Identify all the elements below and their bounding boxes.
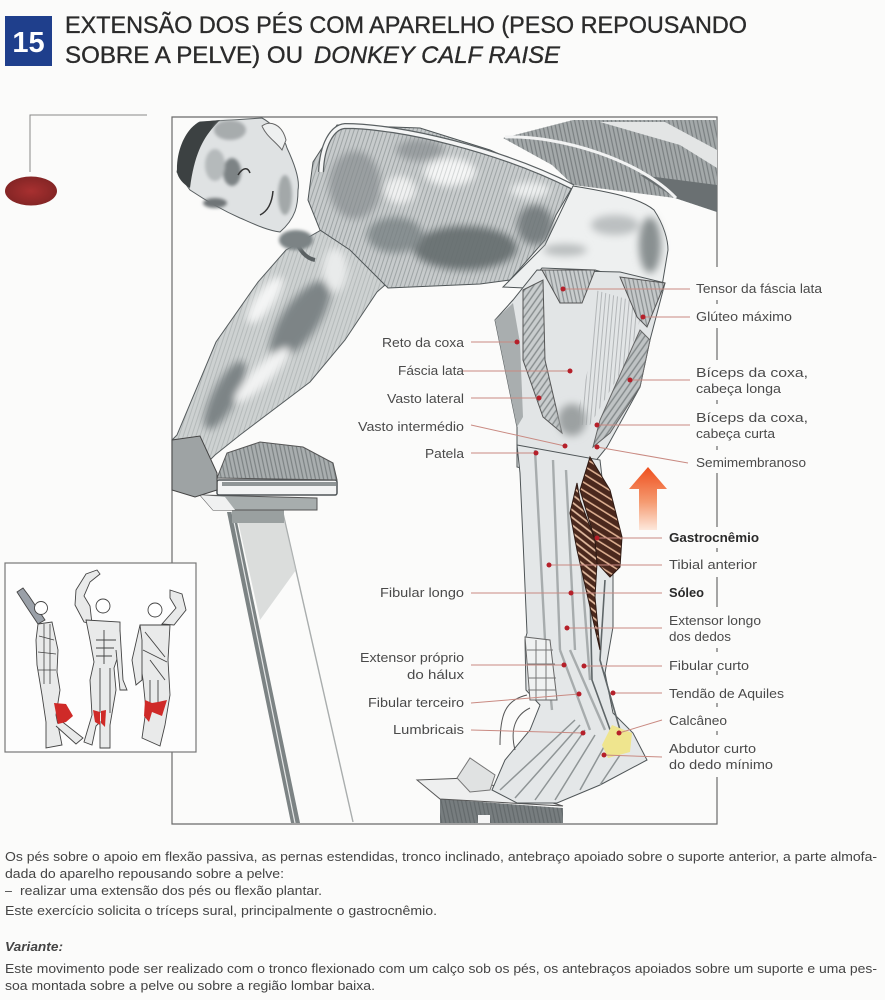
section marker: line and red oval	[5, 115, 147, 206]
leader lines and points	[462, 286, 690, 758]
lower leg and foot	[457, 445, 647, 803]
labels: right muscles: dos dedos	[669, 629, 732, 644]
foot platform	[417, 778, 563, 823]
title: SOBRE A PELVE) OU	[65, 42, 303, 69]
machine: forearm support	[200, 442, 337, 510]
text block: description	[5, 850, 877, 918]
figure: back view right	[132, 590, 186, 746]
labels: right muscles: Abdutor curto	[669, 741, 756, 756]
biceps femoris	[593, 330, 650, 447]
labels: right muscles: Tensor da fáscia lata	[696, 281, 823, 296]
text block: variant: Variante:	[5, 940, 63, 954]
machine: post	[227, 510, 353, 823]
text block: description: Este exercício solicita o tríceps sural, principalmente o gastrocnêmio.	[5, 904, 437, 918]
labels: right muscles: cabeça longa	[696, 381, 782, 396]
labels: right muscles: Semimembranoso	[696, 455, 806, 470]
text block: description: dada do aparelho repousando sobre a pelve:	[5, 867, 284, 881]
labels: right muscles: Gastrocnêmio	[669, 530, 759, 545]
labels: left muscles: Reto da coxa	[382, 335, 465, 350]
illustration: athlete on machine	[172, 118, 717, 823]
figure: front view center	[75, 570, 127, 748]
title	[65, 12, 747, 69]
muscle: soleus highlighted	[570, 483, 600, 650]
labels: left muscles: do hálux	[407, 667, 465, 682]
labels: left muscles	[358, 335, 465, 737]
labels: right muscles: Sóleo	[669, 585, 704, 600]
labels: right muscles: Calcâneo	[669, 713, 727, 728]
labels: left muscles: Patela	[425, 446, 465, 461]
hand on pad	[172, 436, 217, 497]
muscle: gastrocnemius highlighted	[580, 457, 622, 577]
labels: right muscles: Glúteo máximo	[696, 309, 792, 324]
vastus lateralis	[523, 280, 562, 433]
labels: right muscles: Bíceps da coxa,	[696, 365, 808, 380]
labels: right muscles: Tibial anterior	[669, 557, 758, 572]
figure: side view left	[17, 588, 83, 748]
text block: description: realizar uma extensão dos pés ou flexão plantar.	[20, 884, 322, 898]
title: EXTENSÃO DOS PÉS COM APARELHO (PESO REPOUSANDO	[65, 12, 747, 39]
labels: left muscles: Extensor próprio	[360, 650, 464, 665]
text block: variant	[5, 940, 877, 993]
labels: right muscles: Fibular curto	[669, 658, 749, 673]
labels: right muscles: Extensor longo	[669, 613, 761, 628]
gluteus muscle	[620, 277, 665, 327]
tensor muscle	[542, 270, 595, 303]
thigh	[495, 270, 665, 470]
labels: right muscles: Tendão de Aquiles	[669, 686, 785, 701]
text block: description: Os pés sobre o apoio em flexão passiva, as pernas estendidas, tronco inclinado, antebraço apoiado sobre o suporte anterior, a parte almofa-	[5, 850, 877, 864]
shorts / hip	[503, 186, 668, 292]
torso	[295, 125, 573, 288]
labels: left muscles: Lumbricais	[393, 722, 465, 737]
labels: right muscles: do dedo mínimo	[669, 757, 773, 772]
head	[177, 118, 313, 250]
text block: description: –	[5, 884, 12, 898]
frame around illustration	[172, 117, 717, 824]
chapter number badge: 15	[12, 27, 45, 59]
machine: pelvis pad	[503, 120, 717, 212]
labels: left muscles: Vasto intermédio	[358, 419, 464, 434]
chapter number badge	[5, 16, 52, 66]
text block: variant: soa montada sobre a pelve ou sobre a região lombar baixa.	[5, 979, 375, 993]
title: DONKEY CALF RAISE	[314, 42, 561, 69]
text block: variant: Este movimento pode ser realizado com o tronco flexionado com um calço sob os pés, os antebraços apoiados sobre um suporte e uma pes-	[5, 962, 877, 976]
labels: right muscles	[669, 281, 823, 772]
labels: right muscles: Bíceps da coxa,	[696, 410, 808, 425]
labels: right muscles: cabeça curta	[696, 426, 776, 441]
labels: left muscles: Fibular terceiro	[368, 695, 464, 710]
arrow: upward movement	[629, 467, 667, 530]
labels: left muscles: Fáscia lata	[398, 363, 465, 378]
far arm	[172, 225, 385, 480]
labels: left muscles: Fibular longo	[380, 585, 464, 600]
labels: left muscles: Vasto lateral	[387, 391, 464, 406]
rectus strip	[495, 303, 523, 427]
panel: muscle chart with three figures	[5, 563, 196, 752]
